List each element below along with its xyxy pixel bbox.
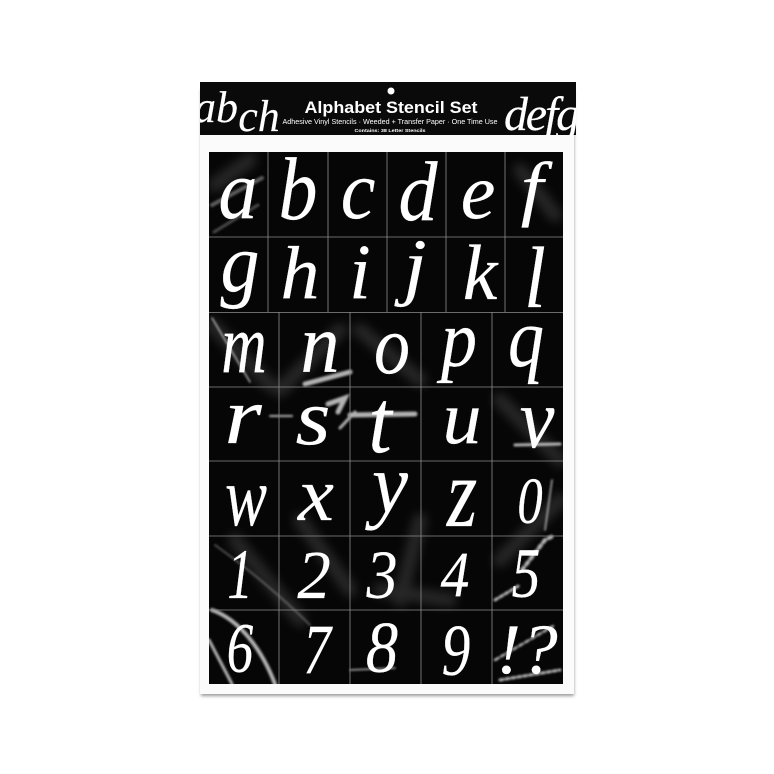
stencil letters: d	[399, 144, 439, 239]
stencil letters: 2	[297, 537, 331, 613]
header band: ch	[238, 92, 280, 141]
stencil letters: j	[394, 225, 427, 308]
stencil letters: 9	[442, 610, 470, 692]
grid lines	[209, 152, 563, 684]
subtitle: Adhesive Vinyl Stencils · Weeded + Transfer Paper · One Time Use	[282, 117, 498, 126]
stencil letters	[218, 141, 558, 692]
stencil sheet	[209, 152, 563, 684]
stencil letters: 6	[227, 608, 254, 688]
hanging hole	[388, 88, 394, 94]
stencil letters: l	[524, 229, 546, 326]
stencil letters: r	[224, 372, 262, 461]
stencil letters: a	[218, 143, 258, 237]
stencil letters: m	[221, 298, 267, 391]
package backing	[200, 84, 574, 696]
stencil letters: z	[446, 439, 477, 548]
plastic wrinkle highlights	[209, 160, 560, 684]
stencil letters: u	[443, 376, 481, 460]
title: Alphabet Stencil Set	[304, 99, 478, 117]
stencil letters: g	[220, 216, 260, 310]
stencil letters: b	[279, 141, 317, 239]
stencil letters: 7	[303, 609, 334, 689]
header script letters left: ab	[194, 83, 238, 132]
stencil letters: !?	[496, 609, 558, 689]
stencil letters: 3	[366, 538, 398, 614]
stencil letters: n	[300, 297, 340, 391]
stencil letters: 1	[227, 536, 253, 614]
contents note: Contains: 38 Letter Stencils	[354, 128, 426, 134]
header band	[200, 82, 576, 135]
stencil letters: q	[508, 291, 544, 384]
stencil letters: v	[520, 371, 555, 466]
stencil letters: h	[281, 231, 319, 315]
stencil letters: k	[463, 229, 499, 316]
header script letters right: defg	[504, 88, 580, 141]
stencil letters: w	[225, 450, 267, 544]
stencil letters: 4	[441, 540, 469, 611]
stencil letters: s	[295, 374, 331, 462]
stencil letters: 8	[366, 606, 398, 688]
stencil letters: 5	[512, 534, 540, 614]
stencil letters: x	[297, 453, 334, 537]
stencil letters: i	[349, 228, 371, 315]
stencil letters: 0	[517, 465, 543, 538]
stencil letters: e	[461, 148, 495, 235]
stencil letters: o	[374, 298, 410, 391]
stencil letters: p	[436, 294, 477, 384]
stencil letters: t	[368, 371, 393, 472]
stencil letters: y	[365, 436, 408, 530]
stencil letters: c	[341, 143, 375, 237]
stencil letters: f	[521, 148, 554, 228]
